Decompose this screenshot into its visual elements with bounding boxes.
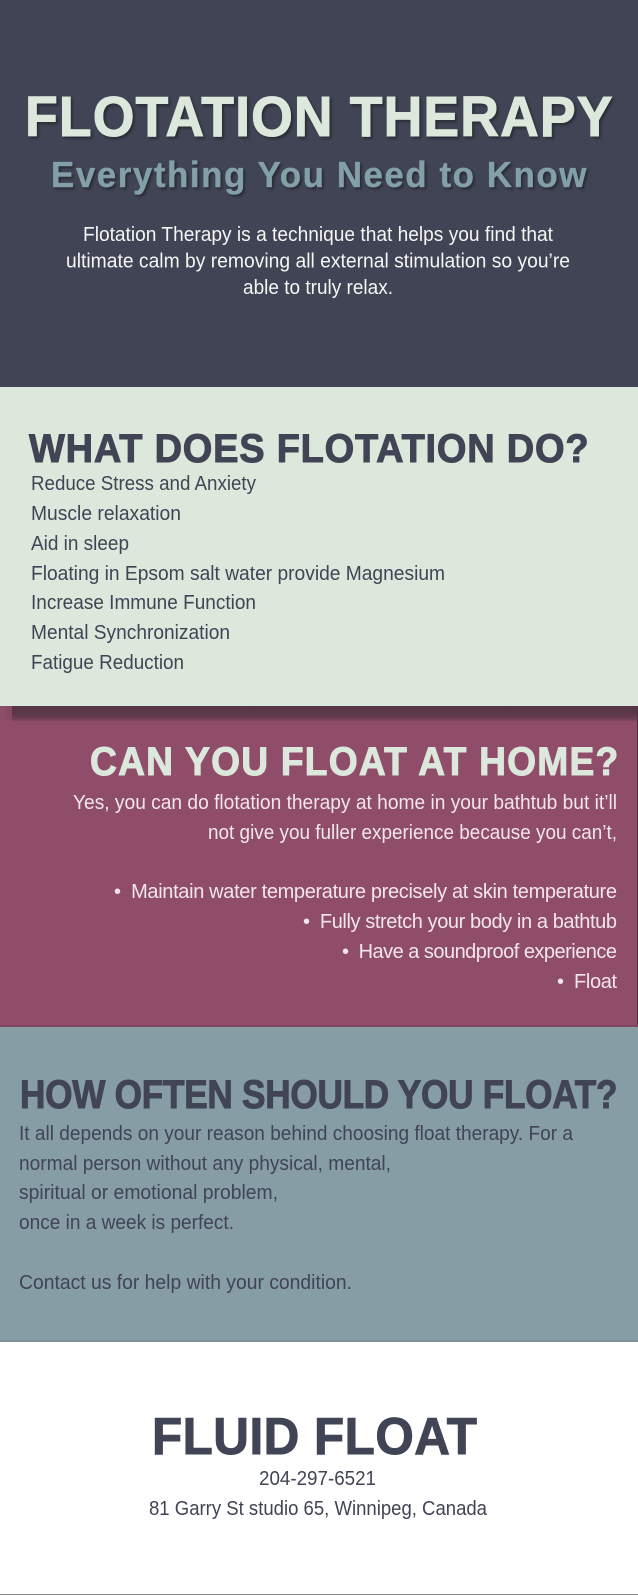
frequency text: once in a week is perfect. bbox=[19, 1212, 234, 1234]
benefits list: Floating in Epsom salt water provide Magnesium bbox=[31, 563, 445, 585]
answer text: Yes, you can do flotation therapy at home in your bathtub but it’ll bbox=[73, 792, 617, 814]
heading: CAN YOU FLOAT AT HOME? bbox=[90, 740, 618, 784]
benefits list: Mental Synchronization bbox=[31, 622, 230, 644]
benefits list bbox=[31, 473, 445, 674]
benefits list: Increase Immune Function bbox=[31, 592, 256, 614]
title: FLOTATION THERAPY bbox=[25, 84, 612, 148]
benefits list: Reduce Stress and Anxiety bbox=[31, 473, 256, 495]
heading: WHAT DOES FLOTATION DO? bbox=[29, 427, 589, 471]
panel: how often should you float bbox=[0, 1027, 638, 1342]
frequency text: spiritual or emotional problem, bbox=[19, 1182, 278, 1204]
bullet list: • Have a soundproof experience bbox=[342, 941, 617, 963]
subtitle: Everything You Need to Know bbox=[51, 155, 587, 195]
frequency text: It all depends on your reason behind choosing float therapy. For a bbox=[19, 1123, 574, 1145]
answer text bbox=[73, 792, 617, 844]
panel: what does flotation do bbox=[0, 387, 638, 706]
answer text: not give you fuller experience because you can’t, bbox=[208, 822, 617, 844]
frequency text bbox=[19, 1123, 574, 1294]
benefits list: Muscle relaxation bbox=[31, 503, 181, 525]
address: 81 Garry St studio 65, Winnipeg, Canada bbox=[149, 1498, 488, 1520]
panel: can you float at home bbox=[0, 706, 638, 1027]
bullet list: • Maintain water temperature precisely at skin temperature bbox=[114, 881, 617, 903]
frequency text: normal person without any physical, mental, bbox=[19, 1153, 391, 1175]
bullet list: • Fully stretch your body in a bathtub bbox=[303, 911, 617, 933]
panel shadow bbox=[5, 706, 638, 722]
brand name: FLUID FLOAT bbox=[152, 1407, 477, 1465]
panel: header bbox=[0, 0, 638, 387]
heading: HOW OFTEN SHOULD YOU FLOAT? bbox=[20, 1072, 618, 1116]
phone: 204-297-6521 bbox=[259, 1468, 376, 1490]
intro text: Flotation Therapy is a technique that helps you find that bbox=[83, 224, 553, 246]
benefits list: Aid in sleep bbox=[31, 533, 129, 555]
intro text: ultimate calm by removing all external stimulation so you’re bbox=[66, 250, 570, 272]
bullet list: • Float bbox=[557, 971, 617, 993]
intro text: able to truly relax. bbox=[243, 277, 393, 299]
bullet list bbox=[114, 881, 617, 993]
frequency text: Contact us for help with your condition. bbox=[19, 1272, 352, 1294]
benefits list: Fatigue Reduction bbox=[31, 652, 184, 674]
panel: footer bbox=[0, 1342, 638, 1595]
intro text bbox=[66, 224, 570, 299]
